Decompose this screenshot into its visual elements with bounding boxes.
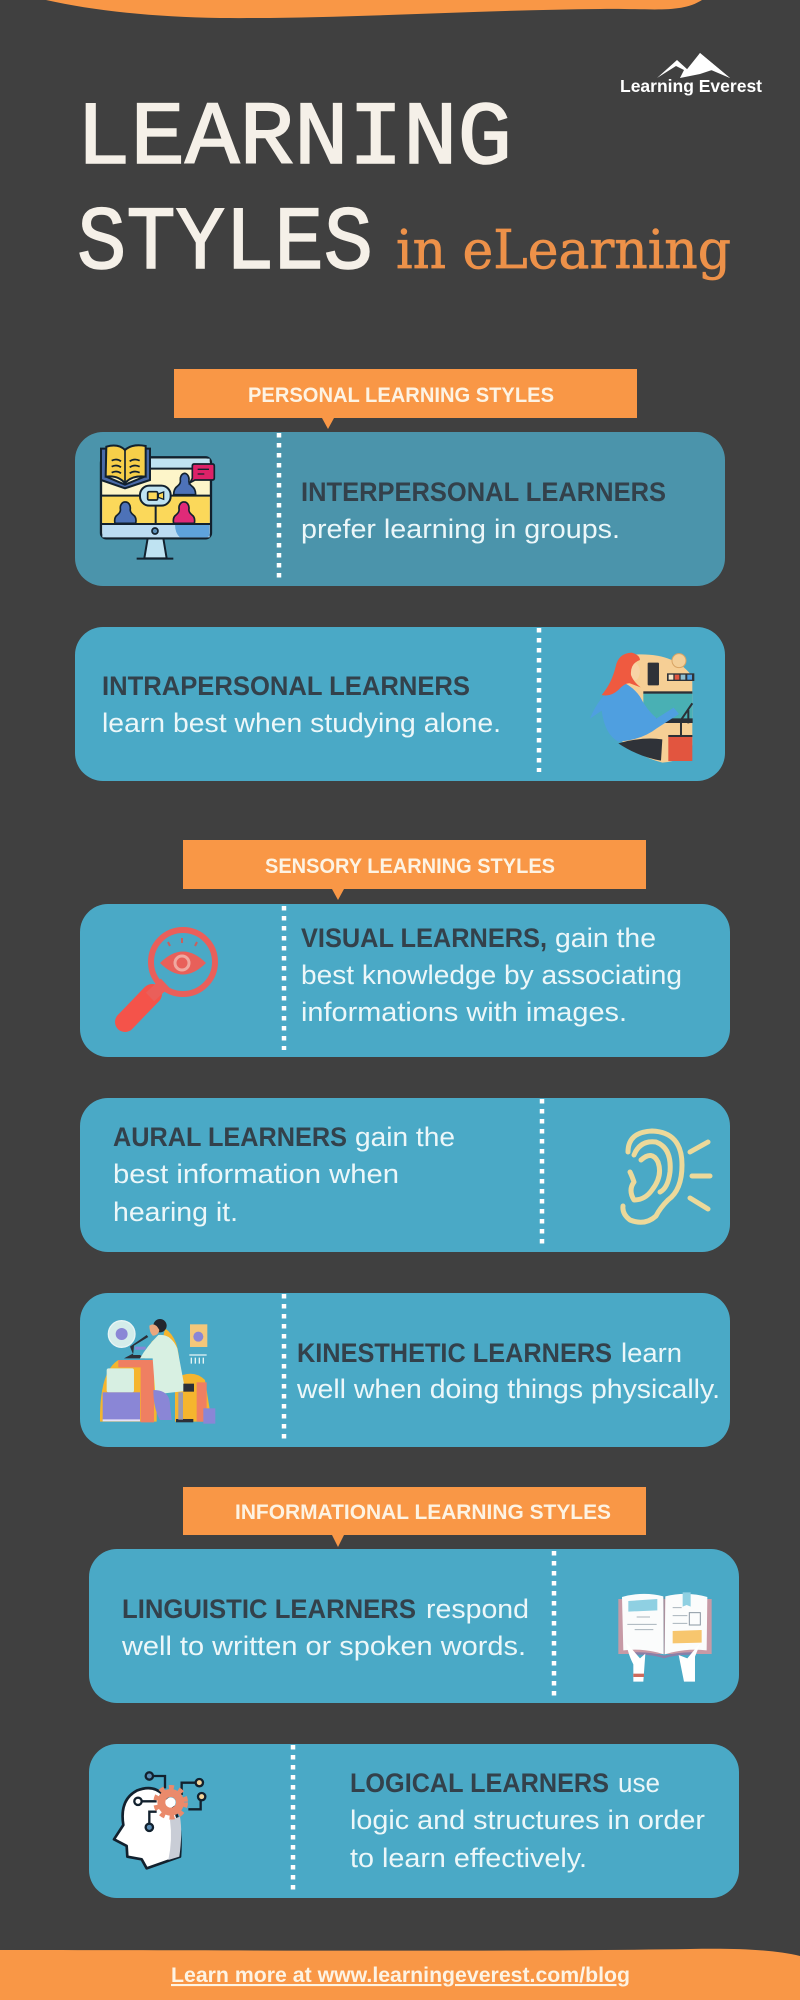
banner: personal learning styles [174, 369, 637, 429]
text: visual learners: best knowledge by associating [301, 960, 682, 990]
text: logical learners: logic and structures in order [350, 1805, 705, 1835]
text: interpersonal learners: prefer learning in groups. [301, 514, 620, 544]
text: aural learners: gain the [355, 1122, 455, 1152]
text: interpersonal learners: INTERPERSONAL LEARNERS [301, 477, 666, 507]
panel: interpersonal learners [75, 432, 725, 586]
text: intrapersonal learners: learn best when studying alone. [102, 708, 501, 738]
banner: informational learning styles: INFORMATIONAL LEARNING STYLES [235, 1501, 611, 1524]
text: linguistic learners: respond [426, 1594, 529, 1624]
text: kinesthetic learners: KINESTHETIC LEARNERS [297, 1338, 612, 1368]
text: logical learners: LOGICAL LEARNERS [350, 1768, 609, 1798]
icon: magnifier with eye [125, 930, 215, 1022]
text: linguistic learners [121, 1594, 529, 1661]
text: aural learners: hearing it. [113, 1197, 238, 1227]
text: logical learners: to learn effectively. [350, 1843, 587, 1873]
text: linguistic learners: LINGUISTIC LEARNERS [122, 1594, 416, 1624]
icon: scientist at microscope [100, 1319, 215, 1424]
panel: linguistic learners [89, 1549, 739, 1703]
text: kinesthetic learners: learn [621, 1338, 682, 1368]
footer band with link [0, 1949, 800, 2000]
text: aural learners [113, 1122, 455, 1227]
icon: head with gear and circuits [114, 1772, 205, 1868]
text: linguistic learners: well to written or spoken words. [121, 1631, 526, 1661]
title [76, 89, 731, 296]
banner: sensory learning styles: SENSORY LEARNING STYLES [265, 855, 555, 878]
panel: visual learners [80, 904, 730, 1057]
icon: ear with sound lines [623, 1131, 710, 1222]
text: kinesthetic learners [296, 1338, 720, 1404]
panel: kinesthetic learners [80, 1293, 730, 1447]
panel: aural learners [80, 1098, 730, 1252]
title: LEARNING [76, 89, 512, 191]
text: kinesthetic learners: well when doing things physically. [296, 1374, 720, 1404]
text: visual learners: informations with images. [301, 997, 627, 1027]
text: interpersonal learners [301, 477, 666, 544]
icon: online group learning monitor with book [101, 445, 214, 559]
icon: woman studying alone at desk [590, 653, 694, 763]
text: aural learners: best information when [113, 1159, 399, 1189]
text: visual learners [301, 923, 682, 1027]
text: aural learners: AURAL LEARNERS [113, 1122, 347, 1152]
text: intrapersonal learners: INTRAPERSONAL LEARNERS [102, 671, 470, 701]
text: intrapersonal learners [102, 671, 501, 738]
logo: Learning Everest: Learning Everest [620, 76, 762, 96]
icon: open book held by hands [618, 1592, 712, 1682]
panel: logical learners [89, 1744, 739, 1898]
logo: Learning Everest [620, 53, 762, 96]
footer band with link: Learn more at www.learningeverest.com/blog [171, 1964, 630, 1987]
text: logical learners [350, 1768, 705, 1873]
banner: informational learning styles [183, 1487, 646, 1547]
panel: intrapersonal learners [75, 627, 725, 781]
top orange wave [46, 0, 702, 18]
banner: personal learning styles: PERSONAL LEARNING STYLES [248, 384, 554, 407]
text: visual learners: VISUAL LEARNERS, [301, 923, 547, 953]
banner: sensory learning styles [183, 840, 646, 900]
text: visual learners: gain the [555, 923, 656, 953]
title: in eLearning [396, 220, 731, 281]
text: logical learners: use [618, 1768, 660, 1798]
title: STYLES [77, 194, 373, 296]
